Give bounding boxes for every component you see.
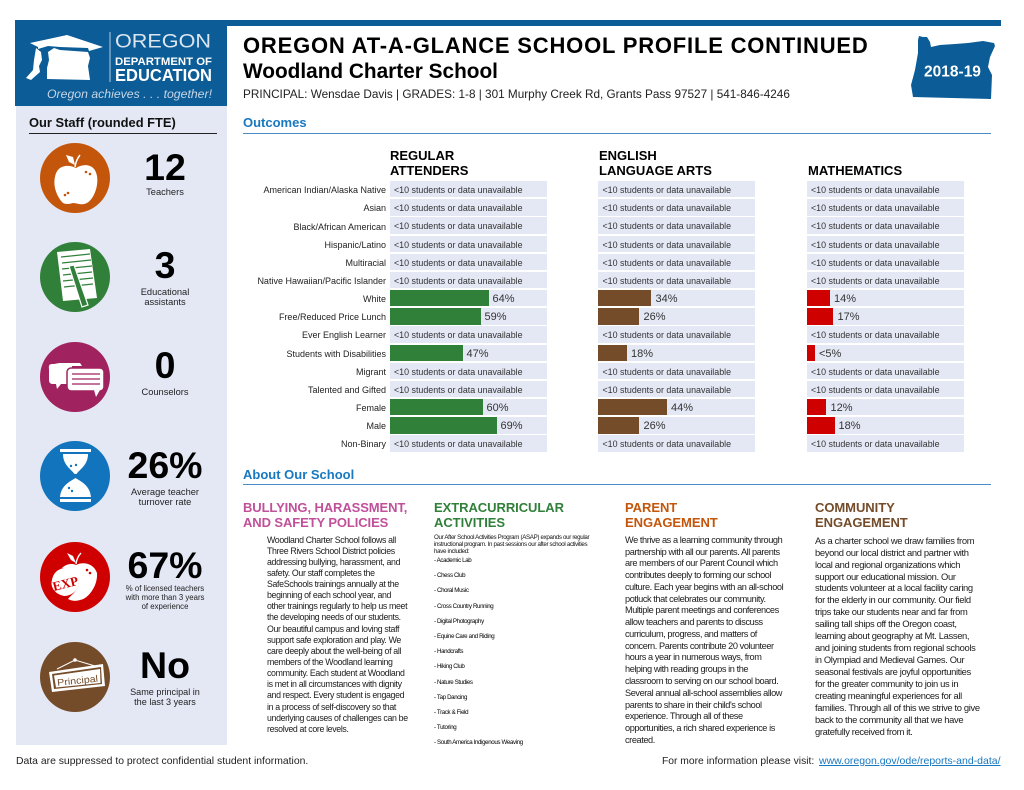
stat: teacher turnover: turnover rate [139,497,191,507]
column heading: english language arts: ENGLISH LANGUAGE ARTS [599,148,712,178]
stat: educational assistants: Educational [141,287,189,297]
badge: Oregon shape 2018-19 [911,36,995,99]
top bar [15,20,1001,26]
bar chart: regular attenders: <10 students or data unavailable [394,439,523,449]
bar chart: mathematics: 18% [838,420,861,432]
column heading: mathematics: MATHEMATICS [808,163,902,178]
heading: bullying: BULLYING, HARASSMENT, AND SAFETY POLICIES [243,500,407,530]
stat: same principal: No [140,644,190,686]
bar chart: mathematics [807,181,964,452]
row labels: Migrant [356,367,386,377]
stat: teachers: Teachers [146,187,184,197]
row labels: Free/Reduced Price Lunch [279,312,386,322]
icon: speech bubbles [40,342,110,412]
bar chart: english language arts: <10 students or data unavailable [602,330,731,340]
stat: experienced teachers: % of licensed teachers [126,584,204,593]
bar chart: english language arts: <10 students or data unavailable [602,240,731,250]
bar chart: regular attenders: 59% [484,311,507,323]
stat: educational assistants: assistants [144,297,186,307]
bar chart: english language arts [598,181,755,452]
row labels: Students with Disabilities [286,349,386,359]
bar chart: mathematics: 17% [838,311,860,323]
row labels: American Indian/Alaska Native [263,185,386,195]
bar chart: mathematics: <10 students or data unavailable [811,203,940,213]
stat: experienced teachers [126,544,204,611]
stat: educational assistants [141,244,189,307]
row labels: Talented and Gifted [308,385,386,395]
bar chart: english language arts: <10 students or data unavailable [602,367,731,377]
bar chart: regular attenders: 47% [466,348,489,360]
bar chart: regular attenders: <10 students or data unavailable [394,330,523,340]
bar chart: english language arts: 44% [671,402,693,414]
bar chart: english language arts: <10 students or data unavailable [602,258,731,268]
icon: bitten apple with EXP [40,542,110,612]
bar chart: mathematics: <10 students or data unavailable [811,240,940,250]
row labels: Multiracial [345,258,386,268]
heading: extracurricular: EXTRACURRICULAR ACTIVITIES [434,500,564,530]
bar chart: english language arts: 18% [631,348,653,360]
panel: staff sidebar [16,106,227,745]
row labels: Non-Binary [341,439,386,449]
text: community engagement: As a charter school we draw families from beyond our local district and partner with local and regional organizations which support our educational mission. Our students volunteer at a local facility caring for the elderly in our community. Our field trips take our students near and far from sailing tall ships off the Oregon coast, learning about geography at Mt. Lassen, and joining students from regional schools in Olympiad and Medieval Games. Our seasonal festivals are joyful opportunities for the greater community to join us in creating meaningful experiences for all families. Through all of this we strive to give back to the community all that we have gratefully received from it. [815,535,980,737]
icon: principal sign: Principal [57,674,99,689]
stat: teacher turnover: Average teacher [131,487,199,497]
bar chart: regular attenders: 64% [492,293,515,305]
footnote: suppressed data: Data are suppressed to protect confidential student information. [16,756,308,767]
bar chart: english language arts: <10 students or data unavailable [602,221,731,231]
bar chart: regular attenders [390,181,547,452]
badge: Oregon shape 2018-19: 2018-19 [924,64,981,80]
logo: Oregon Department of Education: OREGON [115,32,211,52]
row labels: Female [356,403,386,413]
footer: more information: For more information please visit: [662,756,814,767]
icon: apple [40,143,110,213]
logo: Oregon Department of Education: Oregon achieves . . . together! [47,87,213,101]
stat: teachers: 12 [144,146,186,188]
bar chart: english language arts: 34% [656,293,678,305]
school details: PRINCIPAL: Wensdae Davis | GRADES: 1-8 | 301 Murphy Creek Rd, Grants Pass 97527 | 541-846-4246 [243,88,790,101]
row labels: Asian [363,203,386,213]
bar chart: mathematics: <10 students or data unavailable [811,276,940,286]
heading: community engagement: COMMUNITY ENGAGEMENT [815,500,908,530]
bar chart: mathematics: <10 students or data unavailable [811,221,940,231]
list: activities: - Academic Lab - Chess Club - Choral Music - Cross Country Running - Digital Photography - Equine Care and Riding - Handcrafts - Hiking Club - Nature Studies - Tap Dancing - Track & Field - Tutoring - South America Indigenous Weaving [434,557,523,746]
bar chart: mathematics: <10 students or data unavailable [811,185,940,195]
row labels: Male [366,421,386,431]
icon: paper and pencil [40,242,110,312]
bar chart: mathematics: <10 students or data unavailable [811,330,940,340]
stat: counselors [141,344,189,397]
heading: Our Staff: Our Staff (rounded FTE) [29,115,176,130]
bar chart: mathematics: <10 students or data unavailable [811,367,940,377]
stat: counselors: Counselors [141,387,189,397]
icon: hourglass [40,441,110,511]
bar chart: mathematics: <10 students or data unavailable [811,385,940,395]
logo: Oregon Department of Education: EDUCATION [115,65,212,85]
bar chart: regular attenders: <10 students or data unavailable [394,385,523,395]
row labels [257,185,386,449]
bar chart: regular attenders: <10 students or data unavailable [394,203,523,213]
bar chart: regular attenders: 60% [486,402,509,414]
row labels: Black/African American [293,222,386,232]
text: bullying: Woodland Charter School follows all Three Rivers School District policies addressing bullying, harassment, and safety. Our staff completes the SafeSchools trainings annually at the beginning of each school year, and other trainings regularly to help us meet the developing needs of our students. Our beautiful campus and loving staff support safe exploration and play. We care deeply about the well-being of all members of the Woodland learning community. Each student at Woodland is met in all circumstances with dignity and respect. Every student is engaged in a process of self-discovery so that underlying causes of challenges can be resolved at core levels. [267,534,408,734]
stat: same principal [130,644,200,707]
stat: experienced teachers: with more than 3 years [126,593,204,602]
heading: parent engagement: PARENT ENGAGEMENT [625,500,718,530]
bar chart: mathematics: <10 students or data unavailable [811,439,940,449]
stat: teacher turnover [127,444,203,507]
row labels: Hispanic/Latino [324,240,386,250]
column heading: regular attenders: REGULAR ATTENDERS [390,148,468,178]
stat: experienced teachers: of experience [142,602,188,611]
stat: same principal: Same principal in [130,687,200,697]
row labels: Native Hawaiian/Pacific Islander [257,276,386,286]
school name: Woodland Charter School [243,60,498,83]
text: parent engagement: We thrive as a learning community through partnership with all our parents. All parents are members of our Parent Council which contributes deeply to forming our school culture. Each year begins with an all-school potluck that celebrates our community. Multiple parent meetings and conferences allow teachers and parents to discuss curriculum, progress, and matters of concern. Parents contribute 20 volunteer hours a year in numerous ways, from helping with reading groups in the classroom to serving on our school board. Several annual all-school assemblies allow parents to share in their child's school experience. Through all of these opportunities, a rich shared experience is created. [625,535,783,745]
bar chart: mathematics: <5% [819,348,841,360]
stat: educational assistants: 3 [155,244,175,286]
bar chart: english language arts: 26% [644,311,666,323]
logo: Oregon Department of Education: DEPARTMENT OF [115,56,212,68]
bar chart: mathematics: 12% [830,402,853,414]
bar chart: english language arts: <10 students or data unavailable [602,185,731,195]
stat: experienced teachers: 67% [127,544,203,586]
bar chart: mathematics: 14% [834,293,856,305]
bar chart: english language arts: <10 students or data unavailable [602,203,731,213]
text: extracurricular intro: Our After School Activities Program (ASAP) expands our regular instructional program. In past sessions our after school activities have included: [434,534,589,555]
bar chart: regular attenders: <10 students or data unavailable [394,240,523,250]
stat: teacher turnover: 26% [127,444,203,486]
bar chart: regular attenders: <10 students or data unavailable [394,221,523,231]
icon: bitten apple with EXP: EXP [51,573,80,594]
bar chart: mathematics: <10 students or data unavailable [811,258,940,268]
footer link: www.oregon.gov/ode/reports-and-data/ [819,754,1001,766]
bar chart: english language arts: <10 students or data unavailable [602,385,731,395]
bar chart: english language arts: <10 students or data unavailable [602,439,731,449]
bar chart: english language arts: <10 students or data unavailable [602,276,731,286]
logo: Oregon Department of Education [15,26,227,106]
bar chart: regular attenders: 69% [500,420,523,432]
heading: Outcomes: Outcomes [243,115,307,130]
row labels: Ever English Learner [302,330,386,340]
title: OREGON AT-A-GLANCE SCHOOL PROFILE CONTINUED [243,33,869,58]
bar chart: regular attenders: <10 students or data unavailable [394,185,523,195]
bar chart: regular attenders: <10 students or data unavailable [394,367,523,377]
bar chart: regular attenders: <10 students or data unavailable [394,276,523,286]
row labels: White [363,294,386,304]
stat: same principal: the last 3 years [134,697,196,707]
stat: counselors: 0 [155,344,175,386]
bar chart: english language arts: 26% [644,420,666,432]
heading: About Our School: About Our School [243,467,354,482]
icon: principal sign [40,642,110,712]
bar chart: regular attenders: <10 students or data unavailable [394,258,523,268]
